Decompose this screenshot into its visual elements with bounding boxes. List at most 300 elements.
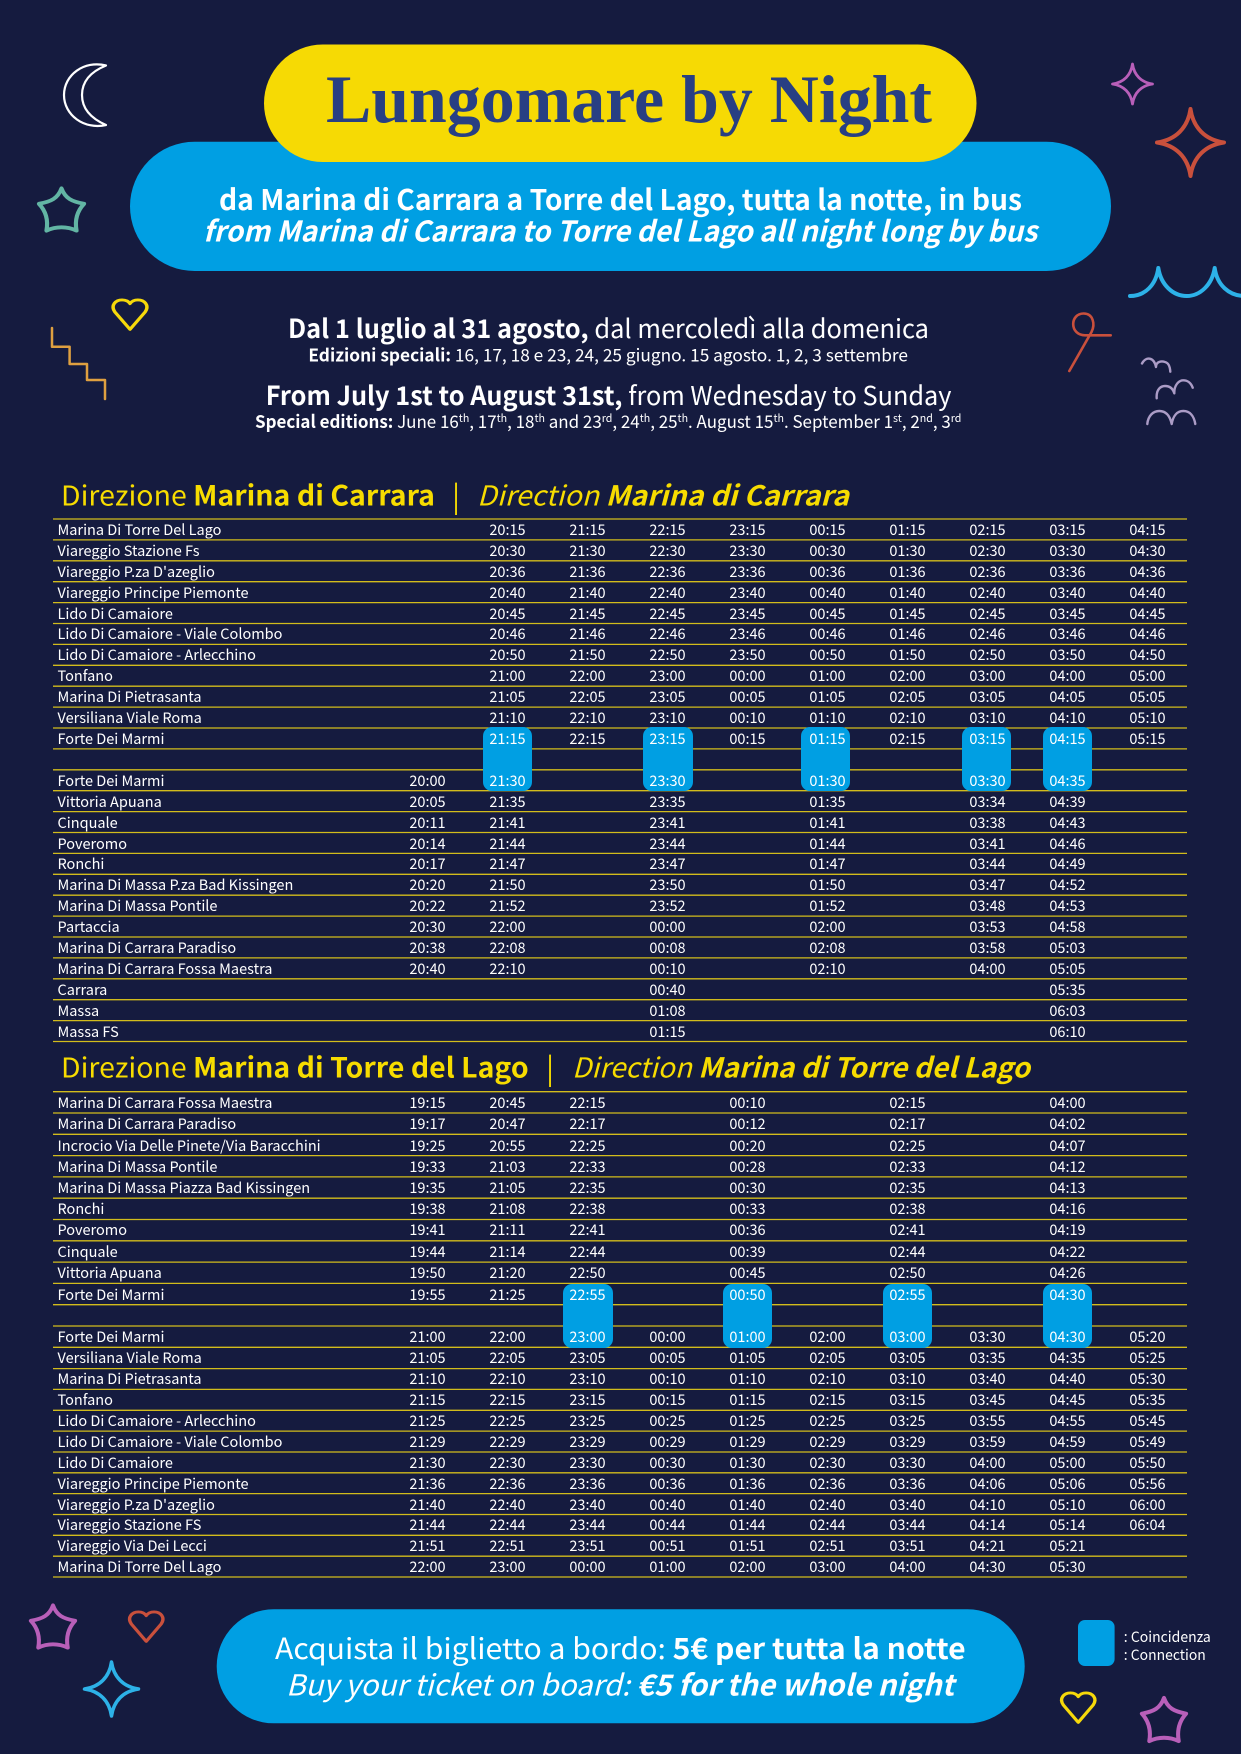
text block: English dates: , 18 (507, 409, 534, 434)
row: Marina Di Carrara Paradiso: 00:12 (729, 1113, 766, 1134)
connection highlight: second timetable, 00:50 to 01:00 (722, 1284, 772, 1348)
row: Marina Di Carrara Fossa Maestra (58, 958, 1086, 979)
text block: English dates: st (893, 410, 902, 426)
row: Tonfano: 02:00 (889, 665, 926, 686)
row: Poveromo: 04:46 (1049, 833, 1086, 854)
row: Viareggio P.za D'azeglio: 02:40 (809, 1494, 846, 1515)
row: Lido Di Camaiore - Viale Colombo: 20:46 (489, 623, 526, 644)
row: Tonfano: 22:15 (489, 1389, 526, 1410)
row: Marina Di Carrara Fossa Maestra: 04:00 (969, 958, 1006, 979)
row: Lido Di Camaiore - Arlecchino: 01:50 (889, 644, 926, 665)
row: Marina Di Pietrasanta: 23:10 (569, 1368, 606, 1389)
row: Marina Di Torre Del Lago (53, 1556, 1187, 1577)
row: Forte Dei Marmi departure: 01:00 (729, 1326, 766, 1347)
row: Lido Di Camaiore - Viale Colombo: 22:29 (489, 1431, 526, 1452)
row: Marina Di Carrara Paradiso: 05:03 (1049, 937, 1086, 958)
row: Marina Di Massa Piazza Bad Kissingen: Marina Di Massa Piazza Bad Kissingen (58, 1177, 310, 1198)
heading: direction Marina di Carrara: | (452, 474, 460, 516)
row: Viareggio Via Dei Lecci: Viareggio Via Dei Lecci (58, 1535, 207, 1556)
icon: red loop (1069, 314, 1111, 371)
text block: English dates: th (773, 410, 784, 426)
title: Lungomare by Night (326, 61, 932, 137)
row: Lido Di Camaiore: 02:30 (809, 1452, 846, 1473)
row: Viareggio Stazione FS: 23:44 (569, 1514, 606, 1535)
row: Marina Di Torre Del Lago: 05:30 (1049, 1556, 1086, 1577)
row: Incrocio Via Delle Pinete/Via Baracchini: 02:25 (889, 1135, 926, 1156)
row: Marina Di Pietrasanta: Marina Di Pietrasanta (58, 686, 202, 707)
row: Lido Di Camaiore - Viale Colombo: 02:29 (809, 1431, 846, 1452)
row: Forte Dei Marmi departure: 23:00 (569, 1326, 606, 1347)
row: Viareggio Principe Piemonte: 00:40 (809, 582, 846, 603)
row: Viareggio Principe Piemonte: 01:36 (729, 1473, 766, 1494)
row: Poveromo: 04:19 (1049, 1219, 1086, 1240)
row: Lido Di Camaiore: 23:30 (569, 1452, 606, 1473)
row: Cinquale: 22:44 (569, 1241, 606, 1262)
row: Viareggio P.za D'azeglio: 21:36 (569, 561, 606, 582)
row: Forte Dei Marmi departure (58, 770, 1086, 791)
row: Marina Di Torre Del Lago: 23:15 (729, 519, 766, 540)
row: Cinquale: 19:44 (409, 1241, 446, 1262)
icon: red heart (130, 1612, 163, 1641)
row: Marina Di Carrara Paradiso: 20:38 (409, 937, 446, 958)
row: Tonfano: 21:15 (409, 1389, 446, 1410)
row: Forte Dei Marmi departure: 20:00 (409, 770, 446, 791)
row: Viareggio Stazione FS: Viareggio Stazione FS (58, 1514, 201, 1535)
row: Marina Di Massa Pontile: 02:33 (889, 1156, 926, 1177)
row: Versiliana Viale Roma: 02:10 (889, 707, 926, 728)
row: Cinquale: 23:41 (649, 812, 686, 833)
row: Forte Dei Marmi arrival: 02:15 (889, 728, 926, 749)
row: Viareggio Stazione Fs: 21:30 (569, 540, 606, 561)
row: Viareggio P.za D'azeglio: Viareggio P.za D'azeglio (58, 1494, 215, 1515)
row: Lido Di Camaiore: 20:45 (489, 603, 526, 624)
row: Viareggio Stazione Fs: Viareggio Stazione Fs (58, 540, 200, 561)
row: Lido Di Camaiore: 03:30 (889, 1452, 926, 1473)
row: Vittoria Apuana: 22:50 (569, 1262, 606, 1283)
row: Viareggio P.za D'azeglio: 00:40 (649, 1494, 686, 1515)
row: Marina Di Torre Del Lago: 01:00 (649, 1556, 686, 1577)
row: Tonfano: 04:00 (1049, 665, 1086, 686)
row: Viareggio Stazione Fs: 04:30 (1129, 540, 1166, 561)
row: Ronchi: 21:08 (489, 1198, 526, 1219)
row: Lido Di Camaiore - Arlecchino: 02:50 (969, 644, 1006, 665)
row: Marina Di Pietrasanta: 00:10 (649, 1368, 686, 1389)
row: Tonfano: 00:00 (729, 665, 766, 686)
row: Versiliana Viale Roma: Versiliana Viale Roma (58, 1347, 202, 1368)
row: Lido Di Camaiore - Viale Colombo: 00:29 (649, 1431, 686, 1452)
row: Forte Dei Marmi arrival: 21:25 (489, 1284, 526, 1305)
row: Vittoria Apuana: 00:45 (729, 1262, 766, 1283)
heading: direction Marina di Carrara (61, 474, 851, 516)
row: Lido Di Camaiore - Arlecchino (58, 644, 1166, 665)
row: Vittoria Apuana: 04:26 (1049, 1262, 1086, 1283)
row: Forte Dei Marmi arrival: Forte Dei Marmi (58, 728, 164, 749)
row: Marina Di Pietrasanta: 03:40 (969, 1368, 1006, 1389)
heading: direction Marina di Carrara: Direzione Marina di Carrara (61, 474, 435, 514)
row: Marina Di Pietrasanta: 04:40 (1049, 1368, 1086, 1389)
row: Massa: 01:08 (649, 1000, 686, 1021)
icon: purple star bottom left (31, 1605, 75, 1648)
row: Lido Di Camaiore: 02:45 (969, 603, 1006, 624)
subtitle: Italian and English: from Marina di Carrara to Torre del Lago all night long by bus (203, 210, 1040, 250)
row: Marina Di Torre Del Lago: 02:00 (729, 1556, 766, 1577)
row: Marina Di Carrara Fossa Maestra: 19:15 (409, 1092, 446, 1113)
row: Marina Di Torre Del Lago: 04:00 (889, 1556, 926, 1577)
row: Massa (58, 1000, 1086, 1021)
row: Ronchi: 20:17 (409, 853, 446, 874)
row: Forte Dei Marmi arrival: 23:15 (649, 728, 686, 749)
row: Forte Dei Marmi departure: 03:30 (969, 770, 1006, 791)
connection highlight: first timetable, 01:15 to 01:30 (800, 727, 850, 791)
row: Forte Dei Marmi arrival: 04:15 (1049, 728, 1086, 749)
row: Versiliana Viale Roma: 23:10 (649, 707, 686, 728)
row: Marina Di Carrara Fossa Maestra: 22:10 (489, 958, 526, 979)
connection highlight: second timetable, 04:30 to 04:30 (1042, 1284, 1092, 1348)
row: Marina Di Massa P.za Bad Kissingen: 01:50 (809, 874, 846, 895)
panel: ticket banner (217, 1609, 1025, 1723)
row: Lido Di Camaiore: 04:45 (1129, 603, 1166, 624)
row: Viareggio Principe Piemonte (53, 1473, 1187, 1494)
row: Marina Di Massa Pontile: 21:03 (489, 1156, 526, 1177)
row: Marina Di Massa Pontile: 23:52 (649, 895, 686, 916)
row: Marina Di Carrara Fossa Maestra: Marina Di Carrara Fossa Maestra (58, 1092, 272, 1113)
text block: English dates: and 23 (545, 409, 602, 434)
row: Forte Dei Marmi departure: 04:35 (1049, 770, 1086, 791)
row: Marina Di Pietrasanta: 02:10 (809, 1368, 846, 1389)
row: Lido Di Camaiore - Viale Colombo: Lido Di Camaiore - Viale Colombo (58, 1431, 282, 1452)
row: Versiliana Viale Roma: 03:10 (969, 707, 1006, 728)
row: Marina Di Pietrasanta: 03:05 (969, 686, 1006, 707)
row: Viareggio P.za D'azeglio: 23:40 (569, 1494, 606, 1515)
row: Massa FS (58, 1021, 1086, 1042)
row: Marina Di Carrara Paradiso: 02:17 (889, 1113, 926, 1134)
row: Marina Di Carrara Paradiso: 19:17 (409, 1113, 446, 1134)
row: Poveromo: 22:41 (569, 1219, 606, 1240)
row: Vittoria Apuana: 01:35 (809, 791, 846, 812)
row: Ronchi: 02:38 (889, 1198, 926, 1219)
text block: English dates (255, 376, 961, 434)
row: Carrara: 00:40 (649, 979, 686, 1000)
row: Marina Di Torre Del Lago: 03:00 (809, 1556, 846, 1577)
row: Marina Di Massa Pontile: 20:22 (409, 895, 446, 916)
row: Versiliana Viale Roma: 00:10 (729, 707, 766, 728)
row: Cinquale: 01:41 (809, 812, 846, 833)
row: Versiliana Viale Roma: 21:05 (409, 1347, 446, 1368)
row: Incrocio Via Delle Pinete/Via Baracchini: 22:25 (569, 1135, 606, 1156)
row: Poveromo: Poveromo (58, 1219, 127, 1240)
row: Cinquale: 21:14 (489, 1241, 526, 1262)
row: Marina Di Pietrasanta (58, 1368, 1166, 1389)
row: Massa FS: Massa FS (58, 1021, 119, 1042)
row: Cinquale (58, 1241, 1086, 1262)
row: Poveromo: 02:41 (889, 1219, 926, 1240)
row: Partaccia: 20:30 (409, 916, 446, 937)
text block: English dates: . September 1 (784, 409, 893, 434)
row: Lido Di Camaiore: 21:45 (569, 603, 606, 624)
row: Viareggio Via Dei Lecci: 03:51 (889, 1535, 926, 1556)
row: Viareggio Via Dei Lecci: 22:51 (489, 1535, 526, 1556)
row: Marina Di Massa Piazza Bad Kissingen: 00:30 (729, 1177, 766, 1198)
row: Viareggio Stazione Fs (58, 540, 1166, 561)
row: Marina Di Massa Pontile: Marina Di Massa Pontile (58, 1156, 217, 1177)
icon: stairs (52, 328, 105, 399)
row: Incrocio Via Delle Pinete/Via Baracchini: Incrocio Via Delle Pinete/Via Baracchini (58, 1135, 321, 1156)
row: Marina Di Massa P.za Bad Kissingen: Marina Di Massa P.za Bad Kissingen (58, 874, 293, 895)
text block: English dates: , 24 (612, 409, 640, 434)
text block: ticket price: Buy your ticket on board: €5 for the whole night (286, 1662, 958, 1704)
row: Lido Di Camaiore - Arlecchino: 03:55 (969, 1410, 1006, 1431)
icon: purple four-point star (1112, 64, 1152, 104)
row: Lido Di Camaiore: Lido Di Camaiore (58, 1452, 173, 1473)
row: Ronchi: Ronchi (58, 853, 104, 874)
timetable: direction Marina di Carrara (58, 519, 1166, 1042)
text block: English dates: From July 1st to August 31st, from Wednesday to Sunday (266, 376, 952, 413)
row: Forte Dei Marmi departure: 03:30 (969, 1326, 1006, 1347)
row: Ronchi (58, 853, 1086, 874)
row: Forte Dei Marmi arrival: 00:50 (729, 1284, 766, 1305)
row: Partaccia: 00:00 (649, 916, 686, 937)
text block: English dates: , 2 (902, 409, 920, 434)
row: Versiliana Viale Roma: 02:05 (809, 1347, 846, 1368)
row: Viareggio Principe Piemonte: 02:36 (809, 1473, 846, 1494)
text block: ticket price (275, 1626, 966, 1704)
row: Lido Di Camaiore - Viale Colombo: 21:46 (569, 623, 606, 644)
icon: purple star bottom right (1142, 1698, 1186, 1741)
row: Marina Di Carrara Paradiso: 22:08 (489, 937, 526, 958)
row: Poveromo: 21:44 (489, 833, 526, 854)
row: Partaccia: 03:53 (969, 916, 1006, 937)
row: Viareggio P.za D'azeglio: 22:40 (489, 1494, 526, 1515)
row: Tonfano (58, 665, 1166, 686)
text block: English dates: . August 15 (688, 409, 773, 434)
row: Marina Di Carrara Paradiso (58, 937, 1086, 958)
row: Lido Di Camaiore - Viale Colombo: 00:46 (809, 623, 846, 644)
row: Marina Di Pietrasanta: 22:05 (569, 686, 606, 707)
row: Forte Dei Marmi arrival: 05:15 (1129, 728, 1166, 749)
timetable: direction Marina di Torre del Lago (58, 1092, 1166, 1577)
row: Viareggio P.za D'azeglio: 02:36 (969, 561, 1006, 582)
row: Marina Di Massa Pontile: Marina Di Massa Pontile (58, 895, 217, 916)
row: Lido Di Camaiore - Arlecchino: 04:55 (1049, 1410, 1086, 1431)
row: Viareggio P.za D'azeglio: 20:36 (489, 561, 526, 582)
row: Marina Di Torre Del Lago: 21:15 (569, 519, 606, 540)
row: Marina Di Carrara Fossa Maestra: 20:40 (409, 958, 446, 979)
row: Lido Di Camaiore - Viale Colombo: Lido Di Camaiore - Viale Colombo (58, 623, 282, 644)
heading: direction Marina di Torre del Lago: | (546, 1046, 554, 1088)
row: Versiliana Viale Roma: 22:05 (489, 1347, 526, 1368)
row: Poveromo: 21:11 (489, 1219, 526, 1240)
row: Marina Di Massa P.za Bad Kissingen: 04:52 (1049, 874, 1086, 895)
connection highlight: second timetable, 22:55 to 23:00 (563, 1284, 612, 1348)
row: Viareggio Principe Piemonte: Viareggio Principe Piemonte (58, 582, 249, 603)
row: Marina Di Torre Del Lago: 00:15 (809, 519, 846, 540)
row: Marina Di Massa P.za Bad Kissingen: 21:50 (489, 874, 526, 895)
row: Forte Dei Marmi departure: 21:00 (409, 1326, 446, 1347)
row: Partaccia (58, 916, 1086, 937)
row: Viareggio P.za D'azeglio: 03:36 (1049, 561, 1086, 582)
row: Ronchi: 04:16 (1049, 1198, 1086, 1219)
panel: blue subtitle banner (130, 142, 1111, 271)
row: Carrara (58, 979, 1086, 1000)
row: Forte Dei Marmi departure: Forte Dei Marmi (58, 770, 164, 791)
row: Lido Di Camaiore - Viale Colombo (53, 1431, 1187, 1452)
row: Marina Di Pietrasanta: 22:10 (489, 1368, 526, 1389)
row: Tonfano: 23:00 (649, 665, 686, 686)
icon: birds (1142, 359, 1195, 424)
text block: English dates: th (497, 410, 507, 426)
row: Massa FS: 06:10 (1049, 1021, 1086, 1042)
row: Lido Di Camaiore - Arlecchino: 01:25 (729, 1410, 766, 1431)
row: Incrocio Via Delle Pinete/Via Baracchini: 19:25 (409, 1135, 446, 1156)
row: Lido Di Camaiore - Viale Colombo: 23:46 (729, 623, 766, 644)
row: Ronchi: 01:47 (809, 853, 846, 874)
row: Lido Di Camaiore - Arlecchino: 22:50 (649, 644, 686, 665)
row: Lido Di Camaiore - Arlecchino: 04:50 (1129, 644, 1166, 665)
row: Marina Di Torre Del Lago: 22:00 (409, 1556, 446, 1577)
row: Viareggio Principe Piemonte (58, 582, 1166, 603)
row: Carrara: 05:35 (1049, 979, 1086, 1000)
row: Versiliana Viale Roma: 22:10 (569, 707, 606, 728)
row: Marina Di Massa Piazza Bad Kissingen: 02:35 (889, 1177, 926, 1198)
row: Partaccia: 04:58 (1049, 916, 1086, 937)
row: Marina Di Massa Pontile: 19:33 (409, 1156, 446, 1177)
row: Marina Di Carrara Paradiso: 00:08 (649, 937, 686, 958)
row: Lido Di Camaiore - Viale Colombo: 03:29 (889, 1431, 926, 1452)
row: Vittoria Apuana (58, 791, 1086, 812)
row: Viareggio Stazione FS: 04:14 (969, 1514, 1006, 1535)
row: Forte Dei Marmi departure: 05:20 (1129, 1326, 1166, 1347)
row: Ronchi: 00:33 (729, 1198, 766, 1219)
row: Ronchi: Ronchi (58, 1198, 104, 1219)
row: Viareggio P.za D'azeglio (53, 1494, 1187, 1515)
row: Vittoria Apuana: Vittoria Apuana (58, 791, 162, 812)
row: Tonfano: Tonfano (58, 1389, 113, 1410)
row: Versiliana Viale Roma: 05:10 (1129, 707, 1166, 728)
row: Viareggio Principe Piemonte: 03:40 (1049, 582, 1086, 603)
row: Forte Dei Marmi arrival: 04:30 (1049, 1284, 1086, 1305)
row: Versiliana Viale Roma: 03:35 (969, 1347, 1006, 1368)
row: Cinquale: 04:22 (1049, 1241, 1086, 1262)
row: Lido Di Camaiore - Viale Colombo (58, 623, 1166, 644)
row: Viareggio Principe Piemonte: 04:40 (1129, 582, 1166, 603)
icon: yellow heart bottom (1062, 1693, 1095, 1722)
row: Marina Di Torre Del Lago: 23:00 (489, 1556, 526, 1577)
row: Marina Di Pietrasanta: 04:05 (1049, 686, 1086, 707)
row: Tonfano: 02:15 (809, 1389, 846, 1410)
row: Viareggio Stazione FS: 03:44 (889, 1514, 926, 1535)
row: Lido Di Camaiore: 03:45 (1049, 603, 1086, 624)
row: Viareggio Stazione Fs: 20:30 (489, 540, 526, 561)
icon: yellow heart (113, 300, 147, 329)
row: Viareggio P.za D'azeglio: 00:36 (809, 561, 846, 582)
row: Marina Di Massa Pontile: 22:33 (569, 1156, 606, 1177)
row: Viareggio P.za D'azeglio: 06:00 (1129, 1494, 1166, 1515)
row: Viareggio P.za D'azeglio: 04:36 (1129, 561, 1166, 582)
text block: English dates: th (678, 410, 688, 426)
row: Vittoria Apuana: 23:35 (649, 791, 686, 812)
row: Viareggio Stazione Fs: 00:30 (809, 540, 846, 561)
row: Viareggio Principe Piemonte: 05:06 (1049, 1473, 1086, 1494)
row: Lido Di Camaiore - Arlecchino: 21:50 (569, 644, 606, 665)
text block: English dates: rd (951, 410, 961, 426)
row: Marina Di Massa P.za Bad Kissingen (58, 874, 1086, 895)
connection highlight: first timetable, 21:15 to 21:30 (482, 727, 532, 791)
row: Viareggio Via Dei Lecci (53, 1535, 1187, 1556)
row: Marina Di Carrara Fossa Maestra: 00:10 (729, 1092, 766, 1113)
row: Versiliana Viale Roma (58, 1347, 1166, 1368)
row: Viareggio Stazione FS (53, 1514, 1187, 1535)
row: Lido Di Camaiore - Arlecchino: 02:25 (809, 1410, 846, 1431)
row: Vittoria Apuana: 21:35 (489, 791, 526, 812)
row: Marina Di Massa P.za Bad Kissingen: 20:20 (409, 874, 446, 895)
row: Viareggio P.za D'azeglio: 05:10 (1049, 1494, 1086, 1515)
row: Versiliana Viale Roma: 05:25 (1129, 1347, 1166, 1368)
row: Marina Di Massa Pontile (58, 895, 1086, 916)
row: Marina Di Torre Del Lago: 01:15 (889, 519, 926, 540)
row: Marina Di Torre Del Lago: Marina Di Torre Del Lago (58, 1556, 221, 1577)
row: Forte Dei Marmi arrival: 22:15 (569, 728, 606, 749)
row: Marina Di Torre Del Lago (58, 519, 1166, 540)
row: Forte Dei Marmi departure: Forte Dei Marmi (58, 1326, 164, 1347)
row: Forte Dei Marmi departure: 00:00 (649, 1326, 686, 1347)
row: Partaccia: 22:00 (489, 916, 526, 937)
row: Poveromo: 00:36 (729, 1219, 766, 1240)
row: Viareggio Stazione FS: 05:14 (1049, 1514, 1086, 1535)
row: Lido Di Camaiore - Arlecchino: 23:50 (729, 644, 766, 665)
row: Marina Di Torre Del Lago: 00:00 (569, 1556, 606, 1577)
row: Viareggio P.za D'azeglio (58, 561, 1166, 582)
row: Viareggio Principe Piemonte: 02:40 (969, 582, 1006, 603)
row: Marina Di Massa P.za Bad Kissingen: 03:47 (969, 874, 1006, 895)
connection highlight: second timetable, 02:55 to 03:00 (882, 1284, 932, 1348)
row: Forte Dei Marmi arrival: 00:15 (729, 728, 766, 749)
row: Marina Di Carrara Fossa Maestra: Marina Di Carrara Fossa Maestra (58, 958, 272, 979)
row: Viareggio Stazione Fs: 23:30 (729, 540, 766, 561)
row: Incrocio Via Delle Pinete/Via Baracchini: 04:07 (1049, 1135, 1086, 1156)
row: Versiliana Viale Roma: 01:10 (809, 707, 846, 728)
row: Cinquale: 04:43 (1049, 812, 1086, 833)
row: Tonfano: 05:35 (1129, 1389, 1166, 1410)
row: Marina Di Carrara Fossa Maestra: 05:05 (1049, 958, 1086, 979)
row: Ronchi: 03:44 (969, 853, 1006, 874)
row: Lido Di Camaiore (58, 603, 1166, 624)
row: Marina Di Torre Del Lago: 04:15 (1129, 519, 1166, 540)
row: Lido Di Camaiore - Arlecchino: Lido Di Camaiore - Arlecchino (58, 644, 256, 665)
row: Versiliana Viale Roma: 03:05 (889, 1347, 926, 1368)
row: Marina Di Pietrasanta (58, 686, 1166, 707)
row: Incrocio Via Delle Pinete/Via Baracchini (58, 1135, 1086, 1156)
row: Cinquale: 00:39 (729, 1241, 766, 1262)
row: Tonfano: 00:15 (649, 1389, 686, 1410)
legend: connection (1078, 1620, 1211, 1666)
row: Lido Di Camaiore - Viale Colombo: 21:29 (409, 1431, 446, 1452)
row: Lido Di Camaiore - Viale Colombo: 04:59 (1049, 1431, 1086, 1452)
row: Forte Dei Marmi departure: 21:30 (489, 770, 526, 791)
row: Cinquale: 02:44 (889, 1241, 926, 1262)
row: Marina Di Massa Pontile: 21:52 (489, 895, 526, 916)
row: Marina Di Torre Del Lago: Marina Di Torre Del Lago (58, 519, 221, 540)
row: Lido Di Camaiore - Arlecchino: 20:50 (489, 644, 526, 665)
row: Tonfano: 22:00 (569, 665, 606, 686)
row: Poveromo: 19:41 (409, 1219, 446, 1240)
row: Marina Di Massa Pontile: 04:12 (1049, 1156, 1086, 1177)
row: Cinquale: Cinquale (58, 1241, 118, 1262)
row: Ronchi: 23:47 (649, 853, 686, 874)
row: Lido Di Camaiore - Arlecchino (53, 1410, 1187, 1431)
row: Vittoria Apuana: 20:05 (409, 791, 446, 812)
row: Viareggio Principe Piemonte: 21:36 (409, 1473, 446, 1494)
row: Marina Di Carrara Paradiso (58, 1113, 1086, 1134)
